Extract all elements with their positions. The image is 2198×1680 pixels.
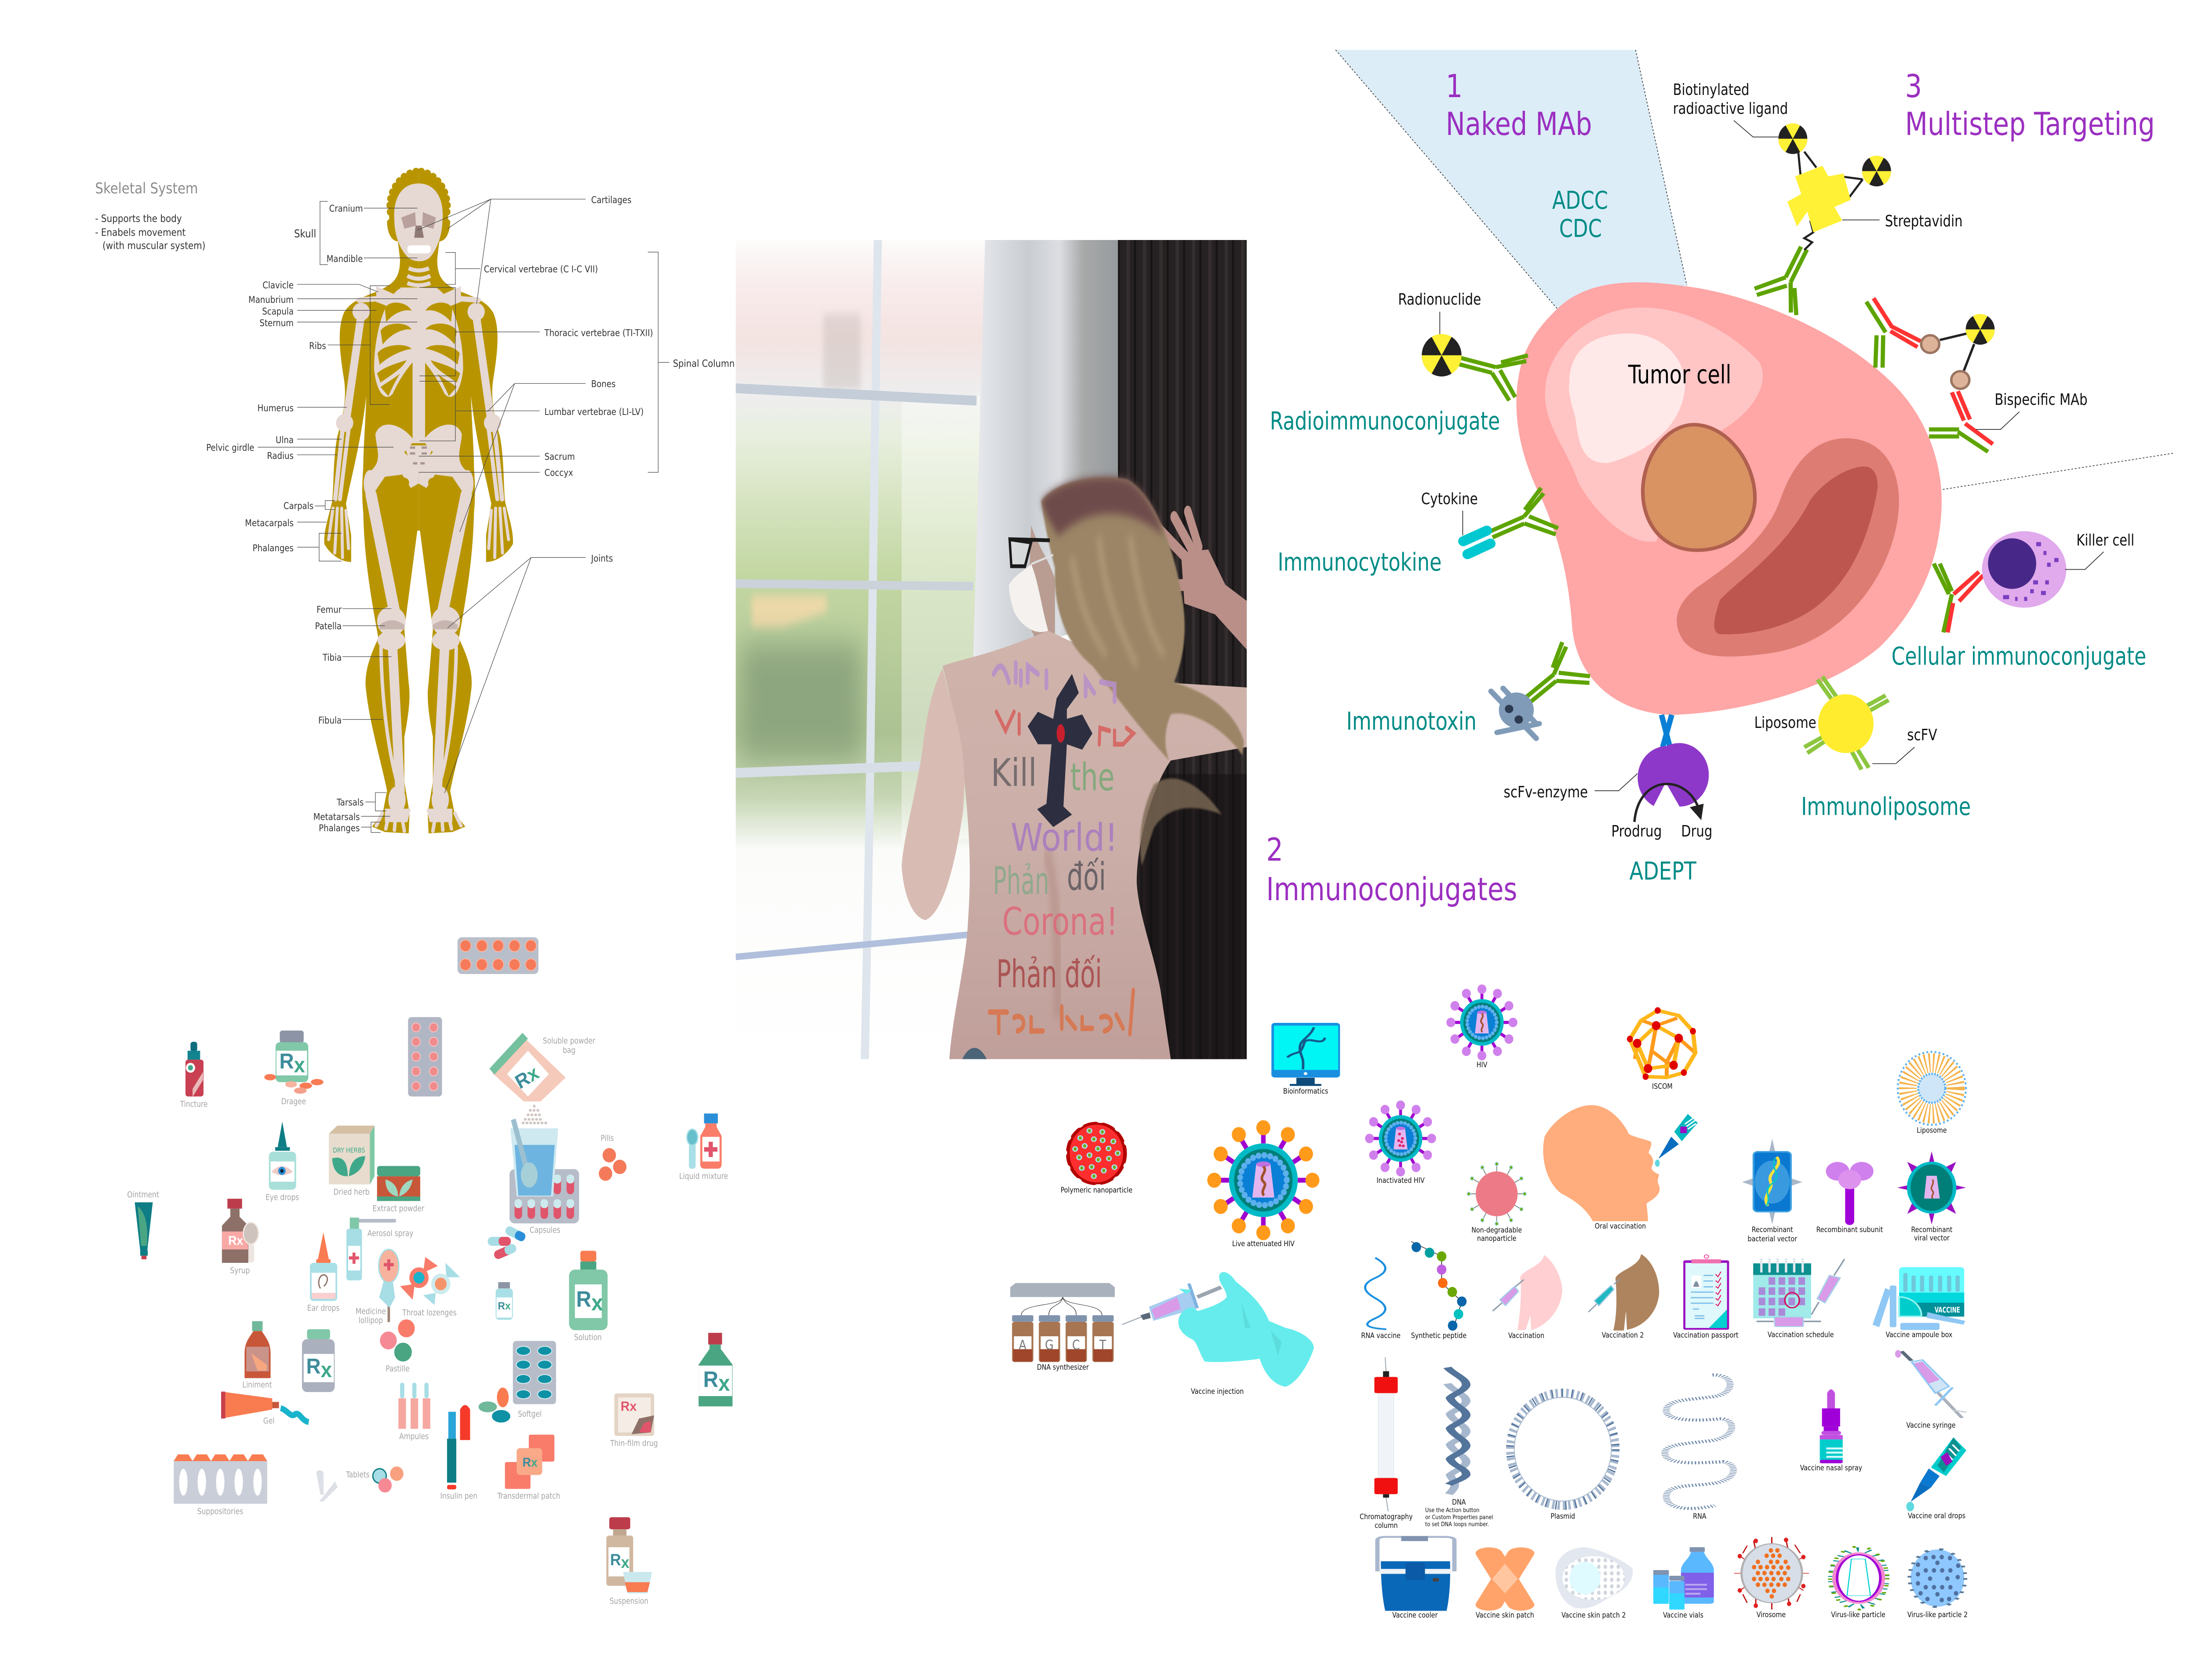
bone labels: Thoracic vertebrae (TI-TXII) (544, 327, 653, 338)
icon: ampules: Ampules (399, 1433, 429, 1441)
icon: soluble powder bag (489, 1033, 596, 1123)
icon: virus-like particle (1830, 1547, 1887, 1619)
icon: soluble powder bag: bag (563, 1046, 575, 1055)
icon: DNA synthesizer (1010, 1283, 1115, 1371)
icon: vaccination (1492, 1255, 1562, 1340)
immunoliposome (1804, 676, 1889, 770)
icon: tablets (316, 1466, 404, 1502)
icon: transdermal patch: Transdermal patch (497, 1492, 560, 1501)
icon: medicine lollipop: lollipop (359, 1316, 383, 1325)
icon: vaccine injection: Vaccine injection (1191, 1387, 1244, 1396)
text block: skeletal functions (95, 213, 205, 251)
icon: transdermal patch (497, 1435, 560, 1501)
icon: recombinant subunit: Recombinant subunit (1816, 1225, 1883, 1234)
icon: DNA synthesizer: DNA synthesizer (1037, 1363, 1089, 1371)
black labels: Liposome (1754, 714, 1816, 732)
icon: vaccine injection (1122, 1272, 1314, 1396)
bone labels: Ulna (276, 435, 294, 445)
icon: suspension: x (621, 1553, 630, 1571)
bone labels: Pelvic girdle (206, 442, 254, 453)
icon: DNA with note: to set DNA loops number. (1425, 1521, 1489, 1528)
icon: green bottle: x (718, 1371, 730, 1396)
body-paint writing: World! (1011, 816, 1118, 860)
text block: skeletal functions: (with muscular system) (102, 240, 205, 251)
icon: ISCOM (1627, 1007, 1696, 1091)
icon: insulin pen: Insulin pen (440, 1492, 477, 1501)
icon: capsules and glass: Capsules (530, 1226, 560, 1235)
bone labels: Radius (267, 451, 294, 461)
icon: DNA synthesizer: G (1045, 1337, 1054, 1353)
icon: dried herb: Dried herb (333, 1188, 370, 1197)
icon: pastille (380, 1320, 415, 1374)
icon: recombinant bacterial vector: Recombinant (1752, 1225, 1793, 1234)
icon: virus-like particle 2 (1907, 1549, 1968, 1619)
icon: live attenuated HIV: Live attenuated HIV (1232, 1240, 1295, 1248)
icon: vaccination schedule: Vaccination schedule (1768, 1331, 1834, 1339)
icon: dragee: Dragee (281, 1097, 306, 1106)
icon: suspension: Suspension (610, 1597, 648, 1606)
icon: bioinformatics: Bioinformatics (1283, 1087, 1328, 1095)
icon: recombinant bacterial vector: bacterial vector (1748, 1235, 1798, 1243)
icon: extract powder (372, 1166, 425, 1214)
icon: vaccination 2 (1588, 1254, 1659, 1339)
ADEPT (1634, 715, 1709, 822)
icon: softgel: Softgel (518, 1410, 542, 1419)
icon: DNA with note: or Custom Properties panel (1425, 1514, 1493, 1521)
bone labels: Fibula (318, 715, 342, 726)
icon: DNA with note: Use the Action button (1425, 1507, 1479, 1514)
icon: softgel (478, 1341, 556, 1422)
bone labels: Sternum (259, 317, 294, 328)
section titles: 2 (1266, 832, 1283, 869)
section titles: 1 (1446, 68, 1463, 105)
teal labels: Immunotoxin (1346, 707, 1477, 735)
icon: RNA vaccine (1361, 1258, 1401, 1340)
icon: virus-like particle: Virus-like particle (1831, 1611, 1885, 1619)
icon: dragee: x (294, 1053, 306, 1077)
icon: vaccine skin patch: Vaccine skin patch (1476, 1611, 1534, 1619)
icon: HIV (1446, 985, 1517, 1069)
icon: extract powder: Extract powder (372, 1204, 425, 1214)
teal labels: Immunocytokine (1278, 548, 1441, 576)
icon: syrup (222, 1199, 258, 1276)
window view (736, 240, 988, 1059)
icon: liposome: Liposome (1917, 1126, 1947, 1135)
icon: ear drops (307, 1233, 339, 1313)
black labels: scFv-enzyme (1504, 783, 1588, 801)
icon: inactivated HIV (1365, 1101, 1436, 1185)
icon: solution (569, 1251, 608, 1342)
icon: vaccine oral drops (1906, 1437, 1966, 1520)
icon: gray bottle: R (306, 1355, 321, 1378)
icon: liposome (1898, 1052, 1966, 1135)
icon: liniment (242, 1321, 272, 1390)
icon: HIV: HIV (1477, 1061, 1487, 1069)
panel: photo at window (736, 240, 1248, 1061)
icon: vertical blister (408, 1017, 442, 1096)
black labels: Tumor cell (1628, 360, 1731, 389)
icon: syrup: Rx (228, 1233, 244, 1247)
multistep targeting (1752, 124, 1891, 315)
icon: dried herb (329, 1126, 375, 1197)
bone labels: Spinal Column (673, 358, 735, 370)
icon: suspension: R (610, 1551, 621, 1569)
icon: pills: Pills (600, 1134, 614, 1143)
icon: vaccine syringe (1895, 1350, 1966, 1429)
section titles (1266, 68, 2155, 908)
icon: eye drops: Eye drops (266, 1193, 299, 1202)
icon: chromatography column: column (1375, 1521, 1398, 1530)
immunotoxin (1491, 642, 1594, 738)
icon: DNA synthesizer: A (1019, 1337, 1026, 1353)
bone labels: Bones (591, 378, 615, 389)
bone labels: Ribs (309, 341, 326, 351)
bone labels: Metacarpals (245, 518, 294, 528)
icon: vaccine skin patch 2 (1555, 1547, 1633, 1619)
icon: synthetic peptide: Synthetic peptide (1411, 1331, 1467, 1340)
icon: chromatography column: Chromatography (1360, 1513, 1413, 1521)
panel: skeletal system (95, 171, 735, 833)
leader lines and brackets (258, 199, 670, 833)
icon: solution: x (591, 1291, 603, 1316)
body-paint writing: Kill (991, 751, 1037, 795)
bone labels: Phalanges (319, 822, 360, 833)
bone labels: Patella (315, 621, 342, 632)
icon: gray bottle (302, 1329, 335, 1392)
icon: soluble powder bag: Soluble powder (543, 1037, 596, 1046)
icon: small vial (496, 1282, 513, 1320)
icon: recombinant viral vector: Recombinant (1911, 1225, 1953, 1234)
icon: syrup: Syrup (230, 1266, 250, 1276)
icon: virosome (1734, 1537, 1809, 1619)
icon: gel (221, 1392, 309, 1425)
black labels: Drug (1681, 822, 1712, 840)
icon: medicine lollipop (356, 1249, 399, 1325)
teal labels: CDC (1559, 214, 1602, 243)
icon: gray bottle: x (321, 1358, 332, 1382)
icon: dragee: R (280, 1050, 294, 1074)
icon: chromatography column (1360, 1357, 1413, 1530)
panel: vaccine icons (1010, 985, 1968, 1619)
icon: soluble powder bag: Rx (512, 1062, 542, 1093)
teal labels: Cellular immunoconjugate (1892, 642, 2146, 670)
icon: vaccine nasal spray: Vaccine nasal spray (1800, 1464, 1862, 1472)
body-paint writing: Corona! (1002, 899, 1118, 944)
section titles: Multistep Targeting (1905, 106, 2155, 143)
icon: dried herb: DRY HERBS (333, 1147, 365, 1154)
icon: insulin pen (440, 1405, 477, 1501)
icon: solution: Solution (574, 1333, 602, 1342)
bone labels: Coccyx (545, 467, 573, 478)
icon: synthetic peptide (1411, 1241, 1467, 1340)
icon: vaccination: Vaccination (1508, 1331, 1544, 1340)
black labels: Biotinylated (1673, 81, 1749, 99)
icon: suppositories (174, 1455, 267, 1516)
panel: tumor cell diagram (1266, 50, 2175, 908)
icon: vaccine syringe: Vaccine syringe (1907, 1421, 1956, 1429)
icon: eye drops (266, 1122, 299, 1202)
icon: vaccine ampoule box: VACCINE (1935, 1306, 1960, 1315)
icon: vaccination 2: Vaccination 2 (1602, 1331, 1644, 1339)
icon: RNA vaccine: RNA vaccine (1361, 1331, 1401, 1340)
black labels (1398, 81, 2134, 840)
black labels: radioactive ligand (1673, 100, 1788, 118)
icon: vaccination passport (1673, 1255, 1739, 1339)
icon: recombinant viral vector (1897, 1151, 1966, 1242)
icon: recombinant subunit (1816, 1162, 1883, 1234)
bispecific MAb (1867, 298, 1994, 452)
body-paint writing: the (1070, 755, 1114, 799)
leader lines (1440, 120, 2103, 791)
icon: vaccine skin patch (1476, 1553, 1534, 1619)
icon: thin-film drug: Thin-film drug (610, 1439, 658, 1448)
bone labels: Humerus (258, 403, 294, 414)
icon: medicine lollipop: Medicine (356, 1307, 386, 1316)
bone labels: Cranium (329, 203, 363, 214)
icon: dragee (264, 1030, 324, 1106)
icon: polymeric nanoparticle: Polymeric nanoparticle (1061, 1186, 1132, 1194)
black labels: Streptavidin (1885, 212, 1962, 230)
icon: aerosol spray: Aerosol spray (368, 1229, 413, 1238)
icon: DNA with note (1425, 1367, 1493, 1528)
body-paint writing: đối (1067, 855, 1106, 899)
icon: suspension (606, 1517, 652, 1606)
black labels: Killer cell (2076, 531, 2134, 549)
icon: recombinant bacterial vector (1742, 1139, 1802, 1243)
section titles: Naked MAb (1446, 106, 1592, 143)
bone labels: Cartilages (591, 195, 631, 205)
icon: ISCOM: ISCOM (1652, 1082, 1673, 1091)
black labels: Bispecific MAb (1994, 391, 2088, 409)
teal labels: ADCC (1552, 186, 1608, 215)
bone labels: Tibia (322, 652, 342, 663)
icon: non-degradable nanoparticle: Non-degradable (1471, 1226, 1522, 1234)
icon: gel: Gel (263, 1417, 275, 1425)
black labels: Prodrug (1611, 822, 1662, 840)
teal labels: Radioimmunoconjugate (1270, 407, 1500, 435)
heading: Skeletal System: Skeletal System (95, 179, 198, 197)
bone labels: Manubrium (248, 294, 294, 305)
curtains (973, 240, 1248, 1061)
icon: pills (599, 1134, 626, 1181)
cellular immunoconjugate (1934, 531, 2066, 633)
text block: skeletal functions: - Enabels movement (95, 227, 186, 239)
bone labels: Skull (294, 227, 316, 240)
teal labels: ADEPT (1630, 857, 1696, 885)
icon: ampules (398, 1382, 430, 1441)
section titles: Immunoconjugates (1266, 871, 1517, 908)
icon: liquid mixture (679, 1113, 728, 1181)
icon: throat lozenges: Throat lozenges (402, 1309, 457, 1318)
icon: ear drops: Ear drops (307, 1304, 339, 1313)
icon: green bottle (699, 1333, 732, 1407)
black labels: Cytokine (1421, 490, 1478, 508)
icon: vaccination passport: Vaccination passport (1673, 1331, 1739, 1339)
icon: non-degradable nanoparticle (1467, 1162, 1526, 1243)
text block: skeletal functions: - Supports the body (95, 213, 182, 225)
icon: plasmid: Plasmid (1550, 1512, 1575, 1520)
bone labels: Carpals (284, 501, 313, 511)
icon: oral vaccination (1543, 1105, 1698, 1230)
icon: solution: R (576, 1287, 591, 1312)
icon: inactivated HIV: Inactivated HIV (1376, 1176, 1425, 1185)
icon: liquid mixture: Liquid mixture (679, 1172, 728, 1181)
icon: recombinant viral vector: viral vector (1914, 1234, 1950, 1242)
icon: transdermal patch: Rx (523, 1455, 538, 1469)
icon: liniment: Liniment (242, 1381, 272, 1390)
section titles: 3 (1905, 68, 1922, 105)
icon: ointment (127, 1191, 159, 1259)
icon: vaccine oral drops: Vaccine oral drops (1908, 1512, 1965, 1520)
icon: tablet blister (458, 937, 539, 974)
bone labels: Metatarsals (313, 811, 360, 822)
icon: throat lozenges (400, 1257, 460, 1318)
figure seen from behind (902, 477, 1247, 1059)
bone labels: Tarsals (336, 797, 364, 808)
icon: live attenuated HIV (1207, 1120, 1319, 1248)
icon: virosome: Virosome (1757, 1611, 1786, 1619)
icon: suppositories: Suppositories (197, 1507, 243, 1516)
bone labels: Clavicle (262, 280, 294, 291)
icon: ointment: Ointment (127, 1191, 159, 1200)
icon: tincture: Tincture (180, 1100, 207, 1109)
bone labels (206, 195, 735, 833)
icon: vaccination schedule (1753, 1259, 1845, 1339)
bone labels: Mandible (327, 254, 363, 264)
bone labels: Femur (317, 604, 342, 615)
icon: vaccine ampoule box: Vaccine ampoule box (1885, 1331, 1953, 1339)
icon: tincture (180, 1042, 207, 1109)
icon: vaccine vials: Vaccine vials (1663, 1611, 1703, 1619)
bone labels: Phalanges (253, 543, 294, 553)
icon: vaccine vials (1653, 1547, 1714, 1619)
diagram shapes (1336, 50, 2175, 822)
bone labels: Joints (591, 553, 613, 564)
icon: RNA (1665, 1375, 1733, 1520)
tumor cell body (1516, 282, 1942, 715)
panel: dosage forms (127, 937, 732, 1606)
radioimmunoconjugate (1422, 334, 1528, 402)
icon: non-degradable nanoparticle: nanoparticle (1477, 1234, 1516, 1243)
icon: vaccine ampoule box (1873, 1267, 1965, 1339)
body-paint writing (990, 663, 1133, 1034)
icon: bioinformatics (1271, 1023, 1340, 1095)
body-paint writing: Phản đối (996, 952, 1102, 996)
icon: DNA synthesizer: C (1072, 1337, 1080, 1353)
icon: vaccine nasal spray (1800, 1389, 1862, 1472)
icon: green bottle: R (703, 1367, 718, 1392)
black labels: scFV (1907, 726, 1937, 744)
icon: vaccine cooler (1377, 1536, 1454, 1619)
figure: body and bones (324, 171, 513, 833)
icon: virus-like particle 2: Virus-like particle 2 (1907, 1611, 1968, 1619)
icon: aerosol spray (346, 1218, 413, 1280)
icon: vaccine cooler: Vaccine cooler (1392, 1611, 1438, 1619)
icon: capsules and glass (488, 1120, 579, 1260)
icon: thin-film drug: Rx (621, 1399, 637, 1414)
icon: plasmid (1510, 1393, 1616, 1520)
tattoo: cross (962, 674, 1092, 1059)
teal labels (1270, 186, 2146, 885)
bone labels: Sacrum (545, 451, 575, 462)
teal labels: Immunoliposome (1801, 792, 1971, 821)
icon: RNA: RNA (1693, 1512, 1707, 1520)
bone labels: Scapula (262, 306, 294, 316)
icon: DNA synthesizer: T (1099, 1337, 1106, 1353)
sector: naked MAb (1336, 50, 1687, 309)
icon: vaccine skin patch 2: Vaccine skin patch 2 (1561, 1611, 1626, 1619)
icon: pastille: Pastille (386, 1364, 410, 1374)
bone labels: Lumbar vertebrae (LI-LV) (545, 407, 644, 417)
icon: tablets: Tablets (346, 1470, 370, 1480)
bone labels: Cervical vertebrae (C I-C VII) (484, 264, 598, 274)
icon: small vial: Rx (498, 1300, 511, 1312)
black labels: Radionuclide (1398, 291, 1481, 309)
body-paint writing: Phản (993, 859, 1049, 903)
immunocytokine (1463, 488, 1561, 558)
icon: DNA with note: DNA (1452, 1498, 1466, 1506)
icon: oral vaccination: Oral vaccination (1595, 1222, 1646, 1230)
icon: polymeric nanoparticle (1061, 1123, 1132, 1194)
icon: thin-film drug (610, 1393, 658, 1448)
